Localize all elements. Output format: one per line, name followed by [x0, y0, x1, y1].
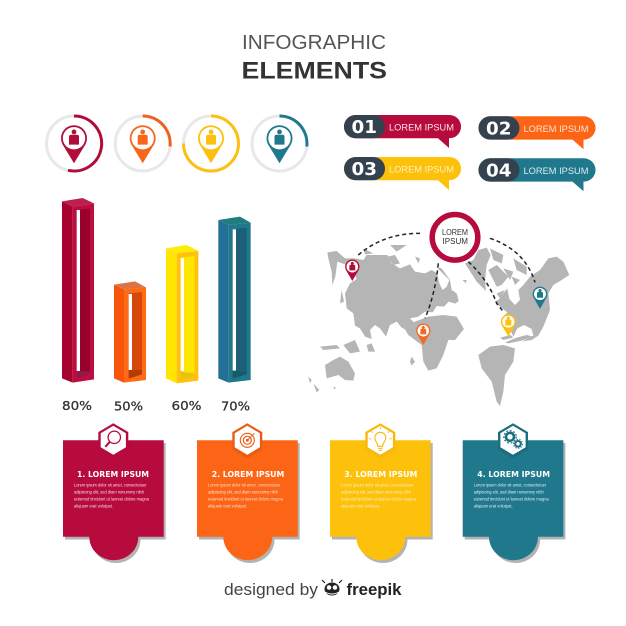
Africa: [403, 315, 464, 371]
bar percentage labels: [62, 399, 250, 414]
map callout circle: IPSUM: [442, 237, 468, 246]
progress rings with pins: [46, 116, 307, 171]
bar 50%: [114, 281, 146, 383]
3D bar chart: [62, 198, 251, 383]
bar 70%: [218, 217, 251, 383]
body text: [341, 482, 416, 508]
Central America: [505, 335, 533, 343]
islands: [308, 245, 527, 392]
bubble 02: 02: [486, 118, 512, 139]
bubble 03: LOREM IPSUM: [389, 164, 454, 176]
body text: Lorem ipsum dolor sit amet, consectetuer: [474, 482, 547, 488]
body text: euismod tincidunt ut laoreet dolore magna: [341, 496, 416, 502]
body text: aliquam erat volutpat.: [341, 504, 380, 508]
title: [242, 31, 387, 84]
panel: card 4: [463, 423, 565, 563]
body text: Lorem ipsum dolor sit amet, consectetuer: [208, 482, 281, 488]
bar 80%: [62, 198, 94, 383]
body text: adipiscing elit, sed diam nonummy nibh: [208, 490, 278, 494]
Australia: [325, 357, 355, 381]
dashed connector lines: [358, 233, 535, 318]
body text: aliquam erat volutpat.: [208, 504, 247, 508]
pin red: [345, 260, 359, 281]
South America: [478, 345, 515, 406]
body text: adipiscing elit, sed diam nonummy nibh: [341, 490, 411, 494]
bubble 04: 04: [486, 160, 512, 181]
body text: [474, 482, 549, 508]
heading: 1. LOREM IPSUM: [77, 470, 149, 479]
map pins: [345, 260, 547, 345]
bar percentage labels: 80%: [62, 399, 92, 414]
body text: Lorem ipsum dolor sit amet, consectetuer: [74, 482, 147, 488]
ring 2: [115, 116, 170, 171]
icon: light bulb in hexagon: [365, 423, 395, 458]
map callout circle: LOREM: [442, 228, 468, 237]
footer credit: designed by: [224, 580, 319, 599]
numbered speech bubbles: [344, 115, 596, 191]
body text: adipiscing elit, sed diam nonummy nibh: [474, 490, 544, 494]
bubble 01: [344, 115, 461, 148]
heading: 3. LOREM IPSUM: [344, 470, 417, 479]
bar percentage labels: 50%: [114, 400, 143, 414]
body text: euismod tincidunt ut laoreet dolore magna: [208, 496, 283, 502]
bar percentage labels: 70%: [221, 400, 250, 414]
footer credit: [224, 579, 402, 599]
bubble 02: LOREM IPSUM: [524, 124, 589, 135]
Greenland: [465, 248, 491, 291]
body text: aliquam erat volutpat.: [474, 504, 513, 508]
panel: card 3: [330, 423, 433, 563]
icon: magnifier in hexagon: [98, 423, 128, 458]
bubble 02: [478, 116, 596, 149]
ring 1: [46, 116, 102, 171]
bubble 03: [344, 157, 461, 190]
map callout circle: [432, 214, 478, 260]
bubble 01: 01: [352, 117, 377, 138]
panel: card 1: [63, 423, 166, 563]
panel: card 2: [197, 423, 300, 563]
bubble 03: 03: [352, 159, 377, 180]
body text: euismod tincidunt ut laoreet dolore magna: [474, 496, 549, 502]
icon: target in hexagon: [232, 423, 262, 458]
Eurasia: [327, 251, 459, 339]
heading: 2. LOREM IPSUM: [212, 470, 284, 479]
title: INFOGRAPHIC: [242, 31, 386, 54]
body text: euismod tincidunt ut laoreet dolore magna: [74, 496, 149, 502]
heading: 4. LOREM IPSUM: [477, 470, 550, 479]
body text: [74, 482, 149, 508]
icon: freepik bee: [322, 579, 342, 596]
body text: aliquam erat volutpat.: [74, 504, 113, 508]
footer credit: freepik: [346, 580, 402, 599]
bubble 04: [478, 158, 596, 191]
body text: Lorem ipsum dolor sit amet, consectetuer: [341, 482, 414, 488]
body text: adipiscing elit, sed diam nonummy nibh: [74, 490, 144, 494]
North America: [495, 257, 569, 342]
bubble 04: LOREM IPSUM: [524, 166, 589, 177]
pin yellow: [501, 314, 516, 337]
bar percentage labels: 60%: [172, 399, 202, 414]
bar 60%: [166, 245, 198, 383]
ring 4: [252, 116, 307, 171]
title: ELEMENTS: [242, 58, 387, 84]
pin orange: [416, 324, 430, 345]
icon: gears in hexagon: [498, 423, 528, 458]
bubble 01: LOREM IPSUM: [389, 122, 454, 134]
body text: [208, 482, 283, 508]
ring 3: [184, 116, 238, 171]
world map: [308, 245, 569, 406]
pin teal: [533, 287, 547, 309]
